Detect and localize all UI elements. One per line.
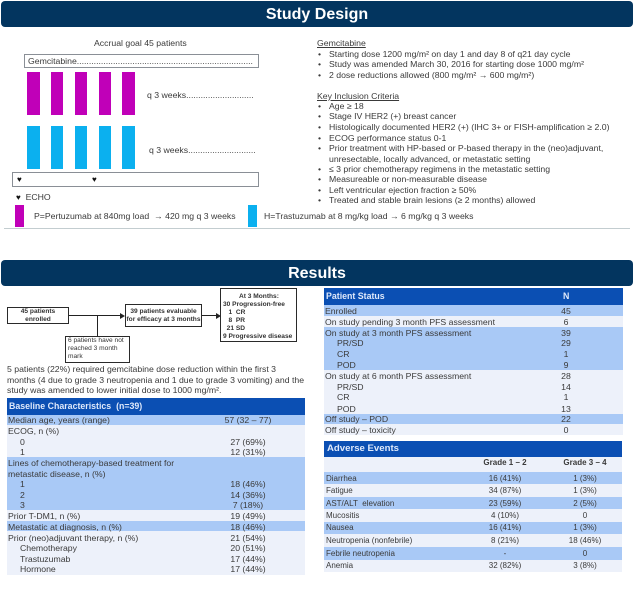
row: lines 1 (20, 479, 266, 489)
row: off study toxicity: 0 (564, 425, 568, 435)
row: neutropenia: 8 (21%) (491, 536, 519, 545)
row: febrile neutropenia: Febrile neutropenia (326, 549, 395, 558)
text block: dose reduction note (7, 364, 304, 395)
text block: Gemcitabine dosing: Gemcitabine (317, 38, 366, 48)
row: trastuzumab: 17 (44%) (230, 554, 266, 564)
row: anemia: 32 (82%) (489, 561, 521, 570)
row: enrolled: Enrolled (325, 306, 357, 316)
row: AST/ALT: 23 (59%) (489, 499, 521, 508)
text block: Key Inclusion Criteria: • (318, 101, 321, 111)
row: nausea (324, 522, 622, 534)
row: 6 month PR/SD: PR/SD (337, 382, 364, 392)
flow box: at 3 months: 21 SD (227, 325, 245, 332)
text block: Key Inclusion Criteria: • (318, 164, 321, 174)
timeline bar: ECHO markers: ♥ (17, 175, 22, 184)
text block: Gemcitabine dosing: Starting dose 1200 mg/m² on day 1 and day 8 of q21 day cycle (329, 49, 570, 59)
legend text: trastuzumab: H=Trastuzumab at 8 mg/kg load → 6 mg/kg q 3 weeks (264, 211, 473, 221)
row: lines of treatment: Lines of chemotherapy-based treatment for (8, 458, 174, 468)
table: patient status: N (563, 291, 569, 301)
row: 3 month PR/SD: 29 (561, 338, 571, 348)
row: 6 month: On study at 6 month PFS assessment (325, 371, 471, 381)
row: fatigue: 34 (87%) (489, 486, 521, 495)
flow box: not reached (65, 336, 130, 363)
chart: trastuzumab dose bars (27, 126, 135, 169)
row: anemia (324, 560, 622, 572)
text block: Gemcitabine dosing: • (318, 49, 321, 59)
row: lines 1: 1 (20, 479, 25, 489)
row: ECOG 1: 12 (31%) (230, 447, 266, 457)
row: 3 month POD (337, 360, 568, 370)
flow box: at 3 months: 8 PR (228, 317, 245, 324)
text block: Gemcitabine dosing: • (318, 70, 321, 80)
text block: Key Inclusion Criteria: • (318, 143, 321, 153)
row: ECOG 0: 27 (69%) (230, 437, 266, 447)
text block: Gemcitabine dosing: Study was amended March 30, 2016 for starting dose 1000 mg/m² (329, 59, 584, 69)
row: febrile neutropenia: - (504, 549, 506, 558)
heading: Study Design banner (1, 1, 633, 27)
row: AST/ALT: AST/ALT elevation (326, 499, 394, 508)
text block: Key Inclusion Criteria: Treated and stable brain lesions (≥ 2 months) allowed (329, 195, 535, 205)
row: pending (325, 317, 568, 327)
flow box: enrolled (7, 307, 69, 324)
row: nausea: 16 (41%) (489, 523, 521, 532)
text block: Key Inclusion Criteria: • (318, 185, 321, 195)
row: off study POD: Off study – POD (325, 414, 388, 424)
flow box: evaluable: for efficacy at 3 months (126, 316, 200, 323)
row: hormone (20, 564, 266, 574)
row: 6 month POD: POD (337, 404, 356, 414)
legend: ECHO: ♥ ECHO (16, 192, 51, 202)
row: 3 month POD: POD (337, 360, 356, 370)
row: chemotherapy (20, 543, 266, 553)
flow box: enrolled: 45 patients (21, 308, 55, 315)
row: mucositis (324, 510, 622, 522)
timeline bar: Gemcitabine (24, 54, 259, 68)
row: 6 month PR/SD (337, 382, 571, 392)
row: off study POD (325, 414, 571, 424)
row: diarrhea (326, 474, 597, 483)
row: median age: 57 (32 – 77) (225, 415, 271, 425)
row: AST/ALT (324, 498, 622, 510)
row: 6 month CR: CR (337, 392, 350, 402)
flow box: not reached: 6 patients have not (68, 337, 124, 344)
arrow: to evaluable patients (120, 313, 125, 319)
row: anemia: 3 (8%) (573, 561, 597, 570)
row: nausea: Nausea (326, 523, 354, 532)
row: chemotherapy: Chemotherapy (20, 543, 77, 553)
text block: Key Inclusion Criteria: ≤ 3 prior chemotherapy regimens in the metastatic setting (329, 164, 550, 174)
table: baseline characteristics (7, 398, 305, 575)
row: nausea: 1 (3%) (573, 523, 597, 532)
text block: Key Inclusion Criteria: Left ventricular ejection fraction ≥ 50% (329, 185, 476, 195)
flow box: at 3 months: At 3 Months: (239, 293, 279, 300)
row: 3 month PR/SD (337, 338, 571, 348)
row: trastuzumab: Trastuzumab (20, 554, 70, 564)
table: adverse events (324, 441, 622, 572)
row: neutropenia: Neutropenia (nonfebrile) (326, 536, 412, 545)
text block: Key Inclusion Criteria: • (318, 133, 321, 143)
text: trastuzumab schedule: q 3 weeks............................ (149, 145, 256, 155)
row: median age (8, 415, 271, 425)
row: lines 2 (20, 490, 266, 500)
row: 3 month CR (337, 349, 568, 359)
row: lines 3 (20, 500, 263, 510)
row: 3 month (325, 328, 571, 338)
row: off study toxicity (325, 425, 568, 435)
row: median age: Median age, years (range) (8, 415, 110, 425)
text block: Gemcitabine dosing: • (318, 59, 321, 69)
flow box: not reached: mark (68, 353, 83, 360)
flow box: at 3 months (220, 288, 297, 342)
text block: Key Inclusion Criteria: Age ≥ 18 (329, 101, 364, 111)
row: febrile neutropenia (324, 548, 622, 560)
text block: Gemcitabine dosing: 2 dose reductions allowed (800 mg/m² → 600 mg/m²) (329, 70, 534, 80)
row: trastuzumab (20, 554, 266, 564)
row: pending: 6 (564, 317, 568, 327)
row: 3 month CR: 1 (564, 349, 568, 359)
row: metastatic at diagnosis (8, 522, 266, 532)
row: grade headers (483, 458, 607, 467)
text block: Key Inclusion Criteria: • (318, 174, 321, 184)
text block: Key Inclusion Criteria: • (318, 195, 321, 205)
row: off study toxicity: Off study – toxicity (325, 425, 396, 435)
text block: Key Inclusion Criteria: Histologically documented HER2 (+) (IHC 3+ or FISH-amplification ≥ 2.0) (329, 122, 609, 132)
row: 3 month POD: 9 (564, 360, 568, 370)
row: 6 month POD: 13 (561, 404, 571, 414)
row: mucositis: 4 (10%) (491, 511, 519, 520)
row: prior neoadjuvant therapy: Prior (neo)adjuvant therapy, n (%) (8, 533, 138, 543)
row: neutropenia: 18 (46%) (569, 536, 601, 545)
legend swatch: pertuzumab (15, 205, 24, 227)
row: 6 month CR (337, 392, 568, 402)
arrow: to 3 month outcomes (216, 313, 221, 319)
text block: Key Inclusion Criteria: unresectable, locally advanced, or metastatic setting (329, 154, 530, 164)
row: grade headers: Grade 1 – 2 (483, 458, 527, 467)
row: ECOG 1 (20, 447, 266, 457)
row: hormone: 17 (44%) (230, 564, 266, 574)
row: enrolled (325, 306, 571, 316)
row: hormone: Hormone (20, 564, 56, 574)
row: 3 month PR/SD: PR/SD (337, 338, 364, 348)
text block: Gemcitabine dosing (317, 38, 584, 80)
row: lines of treatment continued: metastatic disease, n (%) (8, 469, 106, 479)
flow box: not reached: reached 3 month (68, 345, 118, 352)
row: lines 3: 3 (20, 500, 25, 510)
row: prior T-DM1: Prior T-DM1, n (%) (8, 511, 80, 521)
row: 3 month: On study at 3 month PFS assessment (325, 328, 471, 338)
row: lines 1: 18 (46%) (230, 479, 266, 489)
row: fatigue: Fatigue (326, 486, 353, 495)
row: lines 2: 14 (36%) (230, 490, 266, 500)
text block: Key Inclusion Criteria: • (318, 122, 321, 132)
row: ECOG: ECOG, n (%) (8, 426, 59, 436)
row: 6 month PR/SD: 14 (561, 382, 571, 392)
text block: dose reduction note: 5 patients (22%) required gemcitabine dose reduction within the first 3 (7, 364, 276, 374)
row: lines 2: 2 (20, 490, 25, 500)
row: prior T-DM1 (8, 511, 266, 521)
row: off study POD: 22 (561, 414, 571, 424)
row: 3 month CR: CR (337, 349, 350, 359)
row: anemia: Anemia (326, 561, 353, 570)
row: diarrhea: Diarrhea (326, 474, 357, 483)
row: 6 month CR: 1 (564, 392, 568, 402)
table: baseline characteristics: Baseline Characteristics (n=39) (9, 401, 142, 411)
row: chemotherapy: 20 (51%) (230, 543, 266, 553)
text: pertuzumab schedule: q 3 weeks............................ (147, 90, 254, 100)
row: AST/ALT: 2 (5%) (573, 499, 597, 508)
row: prior T-DM1: 19 (49%) (230, 511, 266, 521)
text block: Key Inclusion Criteria: ECOG performance status 0-1 (329, 133, 446, 143)
row: ECOG 1: 1 (20, 447, 25, 457)
row: 6 month (325, 371, 571, 381)
row: febrile neutropenia: 0 (583, 549, 587, 558)
text block: Key Inclusion Criteria (317, 91, 609, 205)
timeline bar: ECHO markers: ♥ (92, 175, 97, 184)
text block: Key Inclusion Criteria: • (318, 111, 321, 121)
table: adverse events: Adverse Events (327, 443, 399, 454)
heading: Results banner (1, 260, 633, 286)
row: fatigue (326, 486, 597, 495)
legend text: pertuzumab: P=Pertuzumab at 840mg load → 420 mg q 3 weeks (34, 211, 236, 221)
row: mucositis: Mucositis (326, 511, 359, 520)
row: metastatic at diagnosis: Metastatic at diagnosis, n (%) (8, 522, 122, 532)
row: grade headers: Grade 3 – 4 (563, 458, 607, 467)
chart: pertuzumab dose bars (27, 72, 135, 115)
text block: Key Inclusion Criteria: Prior treatment with HP-based or P-based therapy in the (neo)adjuvant, (329, 143, 603, 153)
flow box: enrolled: enrolled (25, 316, 51, 323)
legend swatch: trastuzumab (248, 205, 257, 227)
heading: Results banner: Results (288, 265, 346, 282)
table: patient status: Patient Status (326, 291, 385, 301)
text: accrual goal: Accrual goal 45 patients (94, 38, 187, 48)
text block: dose reduction note: months (4 due to grade 3 neutropenia and 1 due to grade 3 vomiting) and the (7, 374, 304, 384)
flow diagram: patient disposition (7, 288, 297, 363)
row: pending: On study pending 3 month PFS assessment (325, 317, 495, 327)
flow box: evaluable (125, 304, 202, 327)
text block: Key Inclusion Criteria: Key Inclusion Criteria (317, 91, 399, 101)
row: ECOG 0 (20, 437, 266, 447)
table: patient status (324, 288, 623, 435)
row: mucositis: 0 (583, 511, 587, 520)
row: enrolled: 45 (561, 306, 571, 316)
row: lines 3: 7 (18%) (233, 500, 263, 510)
flow box: at 3 months: 30 Progression-free (223, 301, 285, 308)
row: diarrhea: 16 (41%) (489, 474, 521, 483)
row: metastatic at diagnosis: 18 (46%) (230, 522, 266, 532)
row: 3 month: 39 (561, 328, 571, 338)
timeline bar: Gemcitabine: Gemcitabine......................................................................... (28, 56, 253, 66)
row: ECOG 0: 0 (20, 437, 25, 447)
row: prior neoadjuvant therapy: 21 (54%) (230, 533, 266, 543)
flow box: at 3 months: 1 CR (228, 309, 245, 316)
text block: Key Inclusion Criteria: Stage IV HER2 (+) breast cancer (329, 111, 456, 121)
timeline bar: ECHO markers (12, 172, 259, 187)
row: neutropenia (324, 535, 622, 547)
row: 6 month: 28 (561, 371, 571, 381)
row: 6 month POD (337, 404, 571, 414)
text block: dose reduction note: study was amended to lower initial dose to 1000 mg/m². (7, 385, 221, 395)
row: prior neoadjuvant therapy (8, 533, 266, 543)
text block: Key Inclusion Criteria: Measureable or non-measurable disease (329, 174, 487, 184)
row: diarrhea: 1 (3%) (573, 474, 597, 483)
flow box: at 3 months: 9 Progressive disease (223, 333, 292, 340)
heading: Study Design banner: Study Design (266, 6, 368, 23)
row: fatigue: 1 (3%) (573, 486, 597, 495)
flow box: evaluable: 39 patients evaluable (130, 308, 197, 315)
